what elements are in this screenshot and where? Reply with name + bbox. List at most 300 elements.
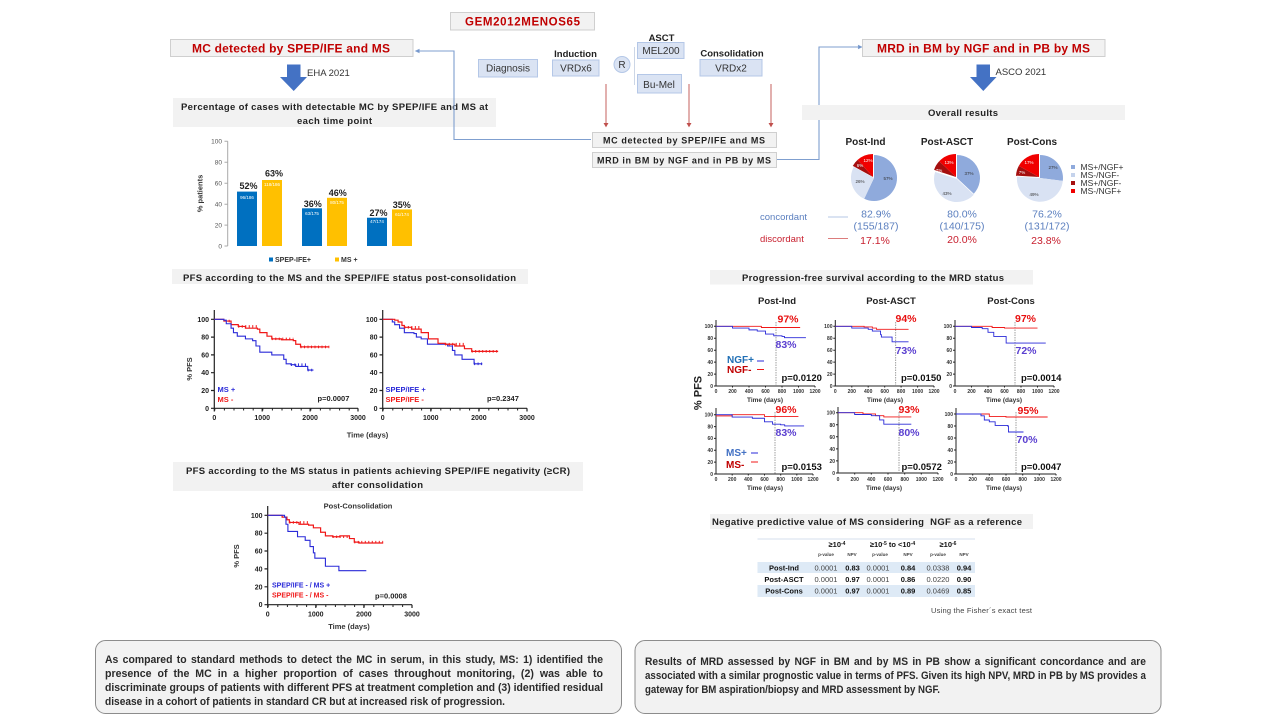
- heading: Progression-free survival: Progression-free survival according to the MRD status: [742, 273, 1004, 284]
- chart: KM post-consolidation: 60: [255, 548, 263, 556]
- chart: KM MS status: 0: [205, 406, 209, 413]
- bar chart: detectable MC: 63/175: [305, 211, 319, 216]
- chart: NGF Post-Cons: 100: [944, 324, 952, 330]
- chart: KM post-consolidation: % PFS: [232, 544, 241, 568]
- panel: treatment schema: VRDx6: [560, 64, 592, 74]
- chart: KM SPEP/IFE status: 20: [370, 388, 378, 395]
- table: NPV: 0.0220: [927, 575, 949, 584]
- chart: NGF Post-ASCT: 20: [827, 372, 833, 378]
- chart: KM SPEP/IFE status: 0: [381, 415, 385, 422]
- chart: MS Post-Ind: 100: [705, 412, 713, 418]
- arrow: blue down arrow EHA: [280, 64, 307, 91]
- note: Fisher's exact test: Using the Fisher´s exact test: [931, 606, 1033, 615]
- pie: Post-ASCT: 13%: [944, 160, 954, 165]
- chart: MS Post-ASCT: 20: [829, 459, 835, 465]
- chart: MS Post-Ind: 200: [728, 477, 737, 483]
- chart: MS Post-Ind: 800: [777, 477, 785, 483]
- table: NPV: 0.0001: [815, 564, 837, 572]
- chart: NGF Post-Cons: p=0.0014: [1021, 373, 1062, 384]
- bar chart: detectable MC: 96/186: [240, 195, 254, 200]
- title: GEM2012MENOS65: [450, 12, 594, 30]
- panel: treatment schema: MEL200: [642, 46, 680, 57]
- chart: MS Post-Cons: Time (days): [986, 485, 1022, 492]
- chart: MS Post-Cons: 100: [945, 412, 953, 418]
- chart: NGF Post-Cons: 200: [967, 389, 976, 395]
- table: NPV: 0.0001: [815, 575, 837, 584]
- chart: MS Post-Cons: 70%: [1016, 434, 1038, 446]
- chart: KM post-consolidation: SPEP/IFE - / MS +: [272, 582, 330, 590]
- chart: KM SPEP/IFE status: 60: [370, 352, 378, 359]
- panel: treatment schema: Consolidation: [700, 48, 764, 60]
- bar chart: detectable MC: MS +: [341, 257, 358, 264]
- chart: NGF Post-ASCT: 600: [881, 389, 889, 395]
- chart: KM SPEP/IFE status: 80: [370, 335, 378, 342]
- callout: left conclusions: presence of the MC in a higher proportion of cases throughout monitoring, (2) was able to: [105, 668, 604, 680]
- pie: Post-ASCT: 43%: [942, 191, 952, 196]
- chart: NGF Post-ASCT: 400: [864, 389, 873, 395]
- chart: NGF Post-Ind: 83%: [775, 339, 797, 351]
- chart: MS Post-ASCT: 200: [851, 477, 859, 483]
- chart: MS Post-ASCT: p=0.0572: [902, 462, 942, 473]
- pie: Post-ASCT: Post-ASCT: [921, 137, 973, 148]
- chart: MS Post-Ind: 80: [707, 424, 713, 430]
- chart: NGF Post-Ind: 0: [710, 384, 713, 390]
- text block: concordance: (131/172): [1025, 220, 1069, 232]
- panel: treatment schema: Bu-Mel: [643, 80, 675, 91]
- chart: MS Post-Cons: 0: [950, 472, 953, 478]
- chart: MS Post-ASCT: 100: [827, 410, 835, 416]
- chart: MS Post-ASCT: 40: [829, 447, 835, 453]
- text block: concordance: 80.0%: [947, 208, 977, 220]
- chart: MS Post-ASCT: 60: [829, 435, 835, 441]
- chart: KM SPEP/IFE status: SPEP/IFE +: [386, 385, 426, 394]
- bar chart: detectable MC: [196, 138, 412, 264]
- heading: overall results: Overall results: [928, 108, 998, 119]
- chart: KM SPEP/IFE status: 0: [374, 406, 378, 413]
- table: NPV: p-value: [872, 552, 888, 557]
- chart: MS Post-Ind: 96%: [775, 404, 797, 416]
- bar chart: detectable MC: 0: [218, 244, 222, 250]
- bar chart: detectable MC: % patients: [196, 175, 204, 212]
- chart: NGF Post-Cons: 1000: [1032, 389, 1043, 395]
- chart: MS Post-Cons: 400: [985, 477, 994, 483]
- chart: NGF Post-ASCT: 80: [827, 336, 833, 342]
- box: MC detected: [592, 132, 776, 148]
- chart: NGF Post-Ind: 60: [707, 348, 713, 354]
- chart: NGF Post-Cons: 400: [984, 389, 992, 395]
- heading: PFS by MS in SPEP/IFE negative: [173, 462, 583, 491]
- chart: NGF Post-Cons: 40: [946, 360, 952, 366]
- pie: Post-Cons: [1007, 137, 1063, 202]
- chart: KM post-consolidation: 3000: [404, 612, 420, 618]
- panel: treatment schema: VRDx2: [715, 64, 747, 74]
- chart: NGF Post-Ind: 800: [778, 389, 786, 395]
- panel: treatment schema: Induction: [554, 49, 597, 60]
- chart: KM MS status: 80: [201, 335, 209, 342]
- chart: KM post-consolidation: p=0.0008: [375, 592, 407, 600]
- chart: KM MS status: 0: [212, 415, 216, 422]
- table: NPV: -6: [952, 541, 957, 547]
- table: NPV: -4: [841, 541, 846, 547]
- axis label: % PFS rows: % PFS: [692, 376, 704, 410]
- bar chart: detectable MC: 47/174: [370, 219, 384, 224]
- chart: KM post-consolidation: Post-Consolidation: [324, 502, 393, 510]
- table: NPV: 0.85: [957, 586, 971, 596]
- chart: MS Post-ASCT: 80%: [898, 427, 920, 439]
- pie: Post-Ind: Post-Ind: [846, 137, 886, 148]
- text block: concordance: 17.1%: [860, 235, 890, 247]
- chart: KM post-consolidation: SPEP/IFE - / MS -: [272, 592, 329, 600]
- pie: Post-Ind: 12%: [863, 158, 873, 163]
- chart: NGF Post-Ind: 1000: [793, 389, 804, 395]
- chart: MS Post-Ind: 600: [760, 477, 769, 483]
- pie: Post-Cons: 49%: [1029, 192, 1039, 197]
- bar chart: detectable MC: 36%: [304, 199, 322, 209]
- chart: NGF Post-Ind: [705, 314, 822, 404]
- panel: treatment schema: [478, 33, 764, 93]
- chart: NGF Post-Cons: 800: [1017, 389, 1025, 395]
- chart: NGF Post-Ind: 200: [728, 389, 737, 395]
- bar chart: detectable MC: 35%: [393, 200, 411, 210]
- chart: NGF Post-Cons: 60: [946, 348, 952, 354]
- chart: NGF Post-ASCT: 60: [827, 348, 833, 354]
- bar chart: detectable MC: 61/174: [395, 212, 409, 217]
- chart: KM MS status: 3000: [350, 415, 366, 422]
- bar chart: detectable MC: 63%: [265, 168, 283, 178]
- chart: NGF Post-ASCT: 40: [827, 360, 833, 366]
- box: MRD in BM: MRD in BM by NGF and in PB by MS: [597, 156, 771, 166]
- panel: treatment schema: Diagnosis: [486, 64, 530, 74]
- label: ASCO 2021: ASCO 2021: [996, 67, 1046, 78]
- arrow: red time point arrows: [604, 84, 773, 126]
- callout: left conclusions: disease in a cohort of patients in standard CR but at increased risk of progression.: [105, 696, 505, 708]
- table: NPV: Post-ASCT: [764, 575, 804, 584]
- column headings: time points: Post-ASCT: [866, 296, 916, 307]
- heading: MRD in BM by NGF and in PB by MS: MRD in BM by NGF and in PB by MS: [877, 42, 1090, 56]
- chart: KM post-consolidation: 0: [266, 612, 270, 618]
- chart: KM post-consolidation: [232, 502, 420, 631]
- chart: NGF Post-ASCT: 100: [824, 324, 833, 330]
- bar chart: detectable MC: SPEP-IFE+: [275, 257, 311, 264]
- table: NPV: 0.0001: [867, 575, 889, 584]
- table: NPV: NPV: [903, 552, 913, 557]
- chart: NGF Post-Ind: NGF-: [727, 365, 751, 376]
- callout: left conclusions: [96, 640, 622, 714]
- arrow: blue connector to MRD heading: [777, 46, 862, 160]
- chart: KM MS status: 100: [197, 317, 209, 324]
- chart: KM SPEP/IFE status: SPEP/IFE -: [386, 395, 424, 404]
- text block: concordance: 20.0%: [947, 234, 977, 246]
- chart: KM SPEP/IFE status: 40: [370, 370, 378, 377]
- table: NPV: 0.97: [845, 586, 860, 596]
- chart: MS Post-Ind: 0: [710, 472, 713, 478]
- table: NPV: ≥10: [829, 540, 841, 549]
- table: NPV: 0.86: [901, 575, 915, 584]
- chart: MS Post-Cons: 600: [1002, 477, 1010, 483]
- table: NPV: ≥10: [940, 540, 952, 549]
- chart: KM SPEP/IFE status: 2000: [471, 415, 487, 422]
- chart: KM MS status: MS -: [218, 395, 234, 404]
- text block: concordance: 76.2%: [1032, 208, 1062, 220]
- chart: KM post-consolidation: Time (days): [328, 622, 370, 631]
- heading: MC detected by SPEP/IFE and MS: MC detected by SPEP/IFE and MS: [192, 42, 390, 56]
- chart: NGF Post-Cons: 80: [946, 336, 952, 342]
- bar chart: detectable MC: 52%: [239, 181, 258, 191]
- chart: NGF Post-Ind: Time (days): [747, 397, 783, 404]
- chart: NGF Post-Ind: 400: [745, 389, 753, 395]
- chart: NGF Post-Ind: 20: [707, 372, 713, 378]
- arrow: blue down arrow ASCO: [970, 64, 996, 91]
- legend: pie categories: MS-/NGF+: [1080, 186, 1121, 196]
- bar chart: detectable MC: 46%: [329, 188, 347, 198]
- chart: NGF Post-Cons: 72%: [1015, 345, 1037, 357]
- legend: pie categories: MS-/NGF-: [1080, 170, 1119, 180]
- table: NPV: to <10: [887, 540, 911, 549]
- chart: KM SPEP/IFE status: 1000: [423, 415, 439, 422]
- chart: MS Post-Ind: Time (days): [747, 485, 783, 492]
- chart: NGF Post-Ind: 600: [761, 389, 770, 395]
- chart: MS Post-Ind: 83%: [775, 427, 797, 439]
- chart: MS Post-Ind: 60: [707, 436, 713, 442]
- bar chart: detectable MC: 80: [215, 160, 222, 166]
- chart: NGF Post-ASCT: 94%: [895, 313, 917, 325]
- arrow: blue connector to MC heading: [416, 50, 591, 140]
- heading: negative predictive value: Negative predictive value of MS considering NGF as a reference: [712, 517, 1022, 528]
- chart: MS Post-Ind: 0: [715, 477, 718, 483]
- chart: MS Post-ASCT: 1200: [932, 477, 944, 483]
- chart: MS Post-Ind: 400: [744, 477, 753, 483]
- chart: NGF Post-ASCT: 73%: [895, 345, 917, 357]
- callout: left conclusions: As compared to standard methods to detect the MC in serum, in this study, MS: 1) identified the: [105, 654, 603, 666]
- text block: concordance: concordant: [760, 212, 807, 223]
- chart: NGF Post-Cons: 600: [1000, 389, 1009, 395]
- chart: KM MS status: 2000: [302, 415, 318, 422]
- chart: MS Post-Ind: 1000: [791, 477, 803, 483]
- table: NPV: 0.0469: [927, 586, 949, 596]
- chart: NGF Post-Cons: 0: [954, 389, 957, 395]
- column headings: time points: [758, 296, 1035, 307]
- chart: MS Post-ASCT: Time (days): [866, 485, 902, 492]
- chart: KM post-consolidation: 2000: [356, 612, 372, 618]
- pie: Post-Cons: 7%: [1019, 170, 1025, 175]
- chart: KM SPEP/IFE status: [366, 310, 535, 422]
- pie: Post-Ind: [846, 137, 897, 201]
- chart: KM MS status: 1000: [254, 415, 270, 422]
- bar chart: detectable MC: 20: [215, 222, 222, 230]
- table: NPV: p-value: [930, 552, 946, 557]
- text block: concordance: (155/187): [854, 220, 898, 232]
- pie: Post-ASCT: 7%: [936, 168, 942, 173]
- chart: KM post-consolidation: 100: [251, 513, 263, 520]
- table: NPV: 0.84: [901, 564, 916, 572]
- callout: right conclusions: gateway for BM aspiration/biopsy and MRD assessment by NGF.: [645, 684, 940, 696]
- chart: KM SPEP/IFE status: 100: [366, 317, 378, 324]
- table: NPV: 0.0001: [867, 586, 889, 596]
- chart: NGF Post-ASCT: 1200: [928, 389, 940, 395]
- label: EHA 2021: EHA 2021: [307, 68, 350, 79]
- chart: MS Post-ASCT: 800: [901, 477, 909, 483]
- chart: MS Post-ASCT: 600: [884, 477, 892, 483]
- heading: PFS by MS in SPEP/IFE negative: PFS according to the MS status in patients achieving SPEP/IFE negativity (≥CR): [186, 466, 570, 477]
- chart: KM post-consolidation: 0: [259, 602, 263, 609]
- chart: KM MS status: p=0.0007: [318, 394, 349, 403]
- chart: KM post-consolidation: 40: [255, 566, 263, 573]
- text block: concordance: discordant: [760, 234, 804, 245]
- column headings: time points: Post-Ind: [758, 296, 796, 307]
- chart: NGF Post-Ind: 1200: [809, 389, 821, 395]
- pie: Post-Cons: Post-Cons: [1007, 137, 1057, 148]
- bar chart: detectable MC: 27%: [369, 208, 388, 218]
- chart: MS Post-Cons: 1200: [1050, 477, 1062, 483]
- chart: NGF Post-Cons: 1200: [1048, 389, 1060, 395]
- chart: MS Post-Cons: 80: [947, 424, 953, 430]
- chart: MS Post-ASCT: 80: [829, 423, 835, 429]
- chart: KM SPEP/IFE status: 3000: [519, 415, 535, 422]
- text block: concordance: 23.8%: [1031, 235, 1061, 247]
- table: NPV: [758, 539, 975, 597]
- chart: MS Post-Cons: 1000: [1034, 477, 1045, 483]
- pie: Post-Ind: 57%: [883, 176, 893, 181]
- axis label: Time (days): Time (days): [347, 430, 389, 440]
- chart: NGF Post-ASCT: Time (days): [867, 397, 903, 404]
- table: NPV: ≥10: [870, 540, 882, 549]
- chart: NGF Post-Ind: p=0.0120: [782, 373, 822, 384]
- table: NPV: 0.83: [845, 564, 860, 572]
- callout: right conclusions: Results of MRD assessed by NGF in BM and by MS in PB show a significant concordance and are: [645, 656, 1146, 668]
- bar chart: detectable MC: 40: [215, 202, 222, 208]
- text block: concordance: [760, 208, 1069, 247]
- chart: MS Post-Ind: [705, 404, 822, 492]
- chart: MS Post-Cons: 20: [947, 460, 953, 466]
- box: MRD in BM: [592, 152, 776, 168]
- pie: Post-ASCT: [921, 137, 980, 202]
- table: NPV: 0.94: [957, 564, 972, 572]
- table: NPV: Post-Cons: [765, 586, 803, 596]
- chart: MS Post-ASCT: 93%: [898, 404, 920, 416]
- chart: NGF Post-Cons: 0: [949, 384, 952, 390]
- chart: NGF Post-Ind: 97%: [777, 314, 799, 326]
- chart: MS Post-Cons: 800: [1019, 477, 1027, 483]
- table: NPV: 0.0338: [927, 564, 949, 572]
- bar chart: detectable MC: 80/175: [330, 200, 344, 205]
- chart: MS Post-Ind: MS+: [726, 448, 747, 459]
- chart: KM MS status: 40: [201, 370, 209, 377]
- chart: NGF Post-ASCT: 1000: [912, 389, 923, 395]
- chart: MS Post-Ind: MS-: [726, 460, 744, 471]
- chart: MS Post-Ind: 40: [707, 448, 713, 454]
- chart: MS Post-Cons: [945, 405, 1062, 492]
- text block: concordance: (140/175): [940, 220, 984, 232]
- chart: KM post-consolidation: 1000: [308, 612, 324, 618]
- chart: MS Post-ASCT: 0: [832, 471, 835, 477]
- chart: KM MS status: 60: [201, 352, 209, 359]
- table: NPV: 0.90: [957, 575, 971, 584]
- callout: left conclusions: discriminate groups of patients with different PFS at treatment completion and (3) identified residual: [105, 682, 603, 694]
- text block: concordance: 82.9%: [861, 208, 891, 220]
- bar chart: detectable MC: 60: [215, 180, 222, 188]
- chart: NGF Post-Ind: NGF+: [727, 355, 754, 366]
- heading: percentage of cases: [173, 98, 496, 127]
- heading: PFS by MS in SPEP/IFE negative: after consolidation: [332, 480, 423, 491]
- chart: NGF Post-Ind: 0: [715, 389, 718, 395]
- chart: MS Post-Cons: 60: [947, 436, 953, 442]
- heading: percentage of cases: Percentage of cases with detectable MC by SPEP/IFE and MS at: [181, 102, 489, 113]
- heading: Progression-free survival: [710, 270, 1033, 284]
- table: NPV: -4: [911, 541, 915, 547]
- chart: NGF Post-ASCT: [824, 313, 941, 404]
- heading: percentage of cases: each time point: [297, 116, 373, 127]
- chart: NGF Post-ASCT: 0: [830, 384, 833, 390]
- table: NPV: Post-Ind: [769, 564, 799, 572]
- chart: KM post-consolidation: 80: [255, 531, 263, 538]
- chart: MS Post-ASCT: 1000: [916, 477, 927, 483]
- table: NPV: 0.89: [901, 586, 915, 596]
- table: NPV: 0.97: [845, 575, 860, 584]
- chart: KM SPEP/IFE status: p=0.2347: [487, 394, 519, 403]
- chart: NGF Post-ASCT: 800: [897, 389, 905, 395]
- legend: pie categories: MS+/NGF-: [1080, 178, 1122, 188]
- column headings: time points: Post-Cons: [987, 296, 1035, 307]
- chart: MS Post-ASCT: 0: [837, 477, 840, 483]
- chart: MS Post-Cons: 0: [955, 477, 958, 483]
- panel: treatment schema: ASCT: [649, 33, 675, 44]
- chart: NGF Post-Cons: 20: [946, 372, 952, 378]
- pie: Post-Cons: 17%: [1024, 160, 1034, 165]
- callout: right conclusions: [635, 640, 1161, 714]
- chart: NGF Post-Cons: [944, 313, 1062, 404]
- axis label: % PFS: % PFS: [185, 357, 194, 381]
- chart: NGF Post-Cons: 97%: [1015, 313, 1037, 325]
- callout: right conclusions: associated with a similar prognostic value in terms of PFS. Given its high NPV, MRD in PB by MS provides a: [645, 670, 1146, 682]
- chart: KM MS status: MS +: [218, 385, 236, 394]
- legend: pie categories: [1071, 162, 1124, 196]
- chart: NGF Post-ASCT: 0: [834, 389, 837, 395]
- chart: KM MS status: 20: [201, 388, 209, 395]
- box: MC detected: MC detected by SPEP/IFE and MS: [603, 136, 765, 146]
- chart: NGF Post-ASCT: 200: [848, 389, 856, 395]
- bar chart: detectable MC: 118/186: [264, 182, 280, 187]
- table: NPV: -5: [882, 541, 887, 547]
- table: NPV: 0.0001: [815, 586, 837, 596]
- chart: MS Post-Cons: 95%: [1017, 405, 1039, 417]
- panel: treatment schema: R: [618, 60, 626, 71]
- chart: MS Post-Cons: p=0.0047: [1021, 462, 1061, 473]
- heading: PFS MS and SPEP/IFE: PFS according to the MS and the SPEP/IFE status post-consolidation: [183, 273, 516, 284]
- chart: MS Post-ASCT: [827, 404, 944, 492]
- pie: Post-Cons: 27%: [1048, 165, 1058, 170]
- chart: MS Post-Ind: p=0.0153: [782, 462, 822, 473]
- title: GEM2012MENOS65: GEM2012MENOS65: [465, 16, 581, 28]
- chart: MS Post-Ind: 1200: [807, 477, 819, 483]
- legend: pie categories: MS+/NGF+: [1080, 162, 1124, 172]
- bar chart: detectable MC: 100: [211, 138, 222, 146]
- table: NPV: NPV: [847, 552, 857, 557]
- heading: MC detected by SPEP/IFE and MS: [170, 40, 413, 56]
- chart: MS Post-ASCT: 400: [867, 477, 876, 483]
- table: NPV: NPV: [959, 552, 969, 557]
- chart: NGF Post-ASCT: p=0.0150: [901, 373, 941, 384]
- chart: KM post-consolidation: 20: [255, 584, 263, 591]
- chart: MS Post-Cons: 40: [947, 448, 953, 454]
- chart: KM MS status: [197, 310, 366, 422]
- heading: overall results: [802, 105, 1125, 120]
- table: NPV: 0.0001: [867, 564, 889, 572]
- chart: NGF Post-Cons: Time (days): [986, 397, 1022, 404]
- chart: MS Post-Ind: 20: [707, 460, 713, 466]
- table: NPV: p-value: [818, 552, 834, 557]
- heading: PFS MS and SPEP/IFE: [172, 269, 528, 284]
- pie: Post-Ind: 26%: [855, 179, 865, 184]
